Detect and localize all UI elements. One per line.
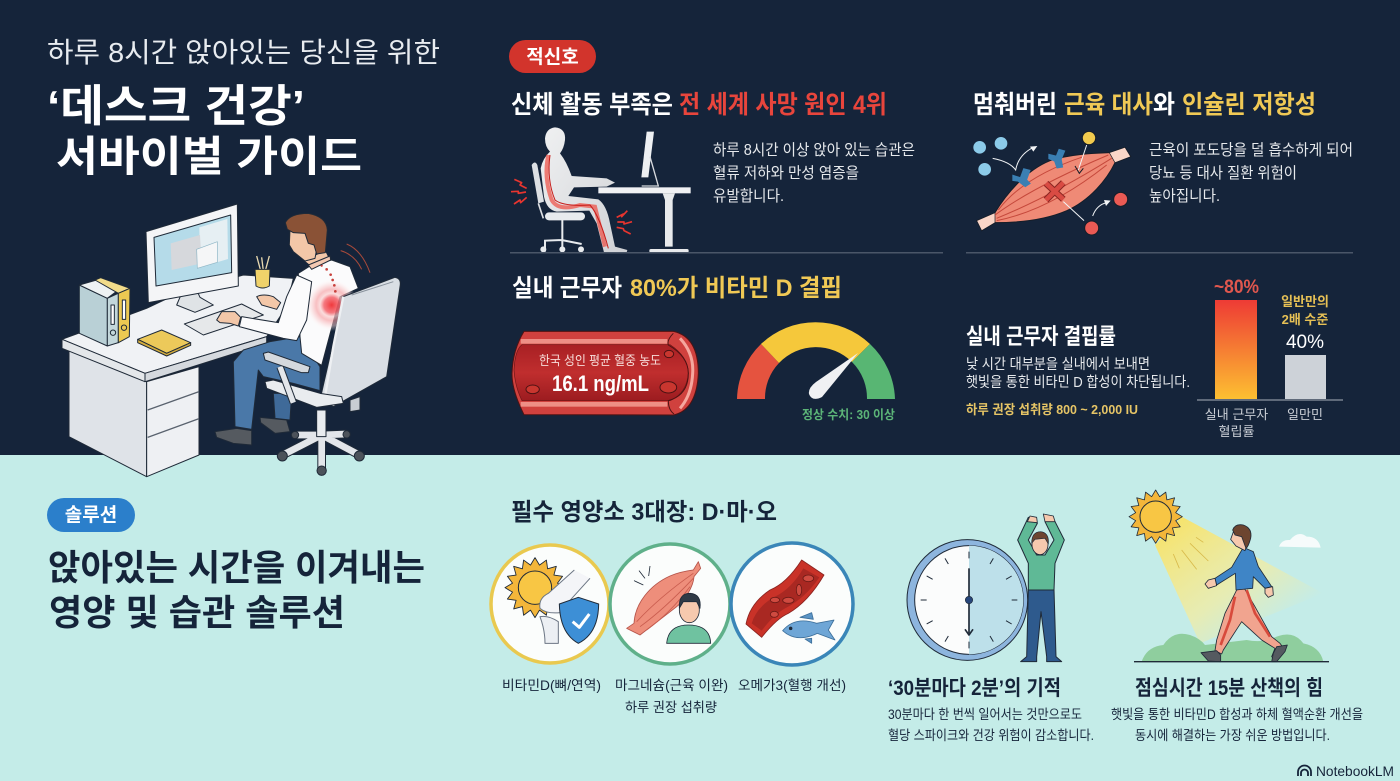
icon: blood vessel with concentration value — [512, 331, 698, 415]
chart: deficiency bars: 일만민 — [1287, 407, 1323, 422]
labels: nutrient captions: 마그네슘(근육 이완) — [615, 678, 728, 693]
section: muscle metabolism and insulin resistance: 와 — [1153, 91, 1175, 119]
panel: red alert — [509, 40, 1353, 439]
heading: solution title: 영양 및 습관 솔루션 — [49, 592, 345, 633]
title block: ‘데스크 건강’ — [47, 82, 305, 131]
title block — [47, 37, 440, 180]
icon: sun beam and walking person — [1129, 490, 1329, 662]
chart: deficiency bars: 일반만의 — [1281, 294, 1329, 309]
text block: lunchtime walk: 동시에 해결하는 가장 쉬운 방법입니다. — [1135, 728, 1330, 743]
illustration: office worker at desk with back pain — [62, 204, 400, 477]
section: muscle metabolism and insulin resistance: 멈춰버린 — [973, 91, 1057, 119]
section: muscle metabolism and insulin resistance: 인슐린 저항성 — [1182, 91, 1316, 119]
section: physical inactivity — [511, 91, 915, 253]
text block: indoor worker deficiency rate — [966, 324, 1190, 417]
section: physical inactivity: 유발합니다. — [713, 187, 784, 205]
chart: deficiency bars: 40% — [1286, 332, 1324, 353]
labels: nutrient captions: 오메가3(혈행 개선) — [738, 678, 846, 693]
section: muscle metabolism and insulin resistance: 당뇨 등 대사 질환 위험이 — [1149, 164, 1297, 182]
icon: omega-3 circle — [731, 543, 853, 665]
heading: three nutrients: 필수 영양소 3대장: D·마·오 — [511, 499, 777, 526]
section: vitamin D deficiency heading: 80%가 비타민 D 결핍 — [630, 275, 842, 302]
icon: muscle with glucose and receptors — [973, 131, 1131, 235]
chart: vitamin D gauge: 정상 수치: 30 이상 — [802, 408, 895, 422]
text block: lunchtime walk: 햇빛을 통한 비타민D 합성과 하체 혈액순환 개선을 — [1111, 707, 1363, 722]
text block: lunchtime walk: 점심시간 15분 산책의 힘 — [1135, 677, 1323, 700]
section: physical inactivity: 하루 8시간 이상 앉아 있는 습관은 — [713, 141, 915, 159]
text block: lunchtime walk — [1111, 677, 1363, 743]
section: vitamin D deficiency heading — [512, 275, 842, 302]
heading: solution title — [48, 547, 425, 633]
badge: solution: 솔루션 — [65, 504, 117, 526]
text block: indoor worker deficiency rate: 햇빛을 통한 비타민 D 합성이 차단됩니다. — [966, 374, 1190, 391]
chart: vitamin D gauge — [737, 322, 895, 422]
badge: red signal: 적신호 — [526, 46, 579, 68]
text block: every 30 minutes: ‘30분마다 2분’의 기적 — [888, 677, 1061, 700]
text block: indoor worker deficiency rate: 낮 시간 대부분을 실내에서 보내면 — [966, 356, 1150, 373]
section: physical inactivity: 신체 활동 부족은 — [511, 91, 673, 119]
text block: indoor worker deficiency rate: 실내 근무자 결핍률 — [966, 324, 1116, 349]
icon: clock and stretching person — [907, 514, 1064, 662]
section: muscle metabolism and insulin resistance — [973, 91, 1353, 235]
chart: deficiency bars: 2배 수준 — [1282, 312, 1328, 327]
text block: indoor worker deficiency rate: 하루 권장 섭취량 800 ~ 2,000 IU — [966, 402, 1138, 417]
chart: deficiency bars: 실내 근무자 — [1205, 407, 1268, 422]
labels: nutrient captions: 하루 권장 섭취량 — [625, 700, 717, 715]
labels: nutrient captions — [502, 678, 846, 715]
section: physical inactivity: 혈류 저하와 만성 염증을 — [713, 164, 859, 182]
title block: 서바이벌 가이드 — [56, 133, 362, 180]
dark top background — [0, 0, 1400, 455]
icon: magnesium circle — [610, 544, 730, 664]
badge: solution — [47, 498, 135, 532]
section: muscle metabolism and insulin resistance: 높아집니다. — [1149, 187, 1220, 205]
badge: red signal — [509, 40, 596, 73]
panel: solutions — [47, 490, 1363, 743]
labels: nutrient captions: 비타민D(뼈/연역) — [502, 678, 601, 693]
icon: vitamin D circle — [491, 545, 609, 663]
icon: blood vessel with concentration value: 16.1 ng/mL — [552, 371, 649, 396]
section: muscle metabolism and insulin resistance: 근육이 포도당을 덜 흡수하게 되어 — [1149, 141, 1353, 159]
section: muscle metabolism and insulin resistance: 근육 대사 — [1064, 91, 1153, 119]
logo: NotebookLM: NotebookLM — [1316, 763, 1394, 779]
heading: solution title: 앉아있는 시간을 이겨내는 — [48, 547, 425, 588]
title block: 하루 8시간 앉아있는 당신을 위한 — [47, 37, 440, 68]
chart: deficiency bars: 혈립률 — [1219, 424, 1254, 439]
light bottom background — [0, 455, 1400, 781]
text block: every 30 minutes: 30분마다 한 번씩 일어서는 것만으로도 — [888, 707, 1082, 722]
text block: every 30 minutes — [888, 677, 1094, 743]
text block: every 30 minutes: 혈당 스파이크와 건강 위험이 감소합니다. — [888, 728, 1094, 743]
icon: blood vessel with concentration value: 한국 성인 평균 혈중 농도 — [539, 353, 661, 368]
chart: deficiency bars: ~80% — [1214, 277, 1259, 298]
icon: seated body silhouette with circulation pain — [511, 127, 691, 253]
section: vitamin D deficiency heading: 실내 근무자 — [512, 275, 622, 302]
chart: deficiency bars — [1197, 277, 1343, 439]
section: physical inactivity: 전 세계 사망 원인 4위 — [679, 91, 887, 119]
